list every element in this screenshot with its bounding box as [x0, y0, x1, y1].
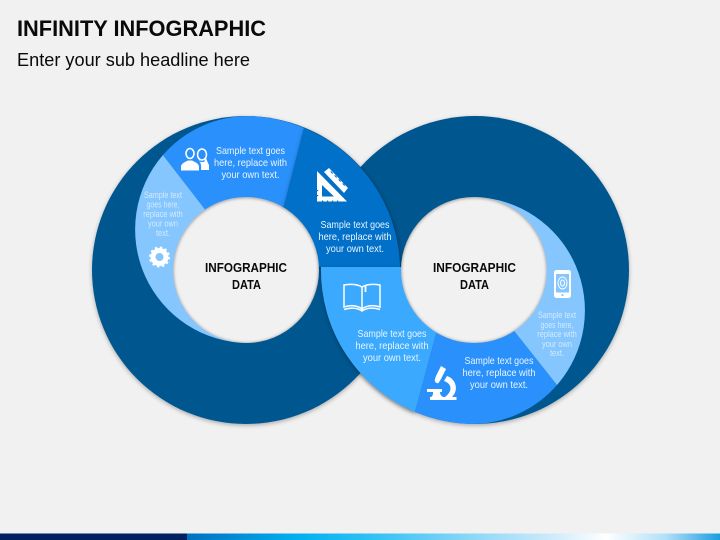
text: left light segment: goes here, [146, 200, 180, 210]
icon: book [344, 284, 380, 311]
infinity diagram [92, 116, 629, 424]
segment: left medium blue [246, 128, 400, 270]
text: left light segment: Sample text [144, 190, 182, 200]
left ring: dark base [92, 116, 400, 424]
text: right light segment: text. [550, 348, 564, 358]
text: left medium segment: your own text. [326, 243, 384, 255]
text: left medium segment: Sample text goes [320, 219, 390, 231]
text: right bright segment: here, replace with [356, 340, 429, 352]
icon: gear [150, 248, 169, 266]
text: right bright segment: your own text. [363, 352, 421, 364]
right ring: dark base [321, 116, 629, 424]
text: right bottom segment: Sample text goes [464, 355, 534, 367]
text: right light segment: goes here, [540, 320, 574, 330]
footer bar: navy section [0, 534, 187, 540]
right center label: DATA [460, 277, 490, 292]
text: left light segment: your own [148, 218, 178, 228]
text: right bright segment [356, 328, 429, 364]
text: right light segment: replace with [537, 329, 577, 339]
segment: left top blue [163, 116, 304, 270]
text: right bottom segment [462, 355, 536, 391]
text: right light segment: your own [542, 339, 572, 349]
text: right light segment: Sample text [538, 310, 576, 320]
text: left top segment [214, 145, 287, 181]
segment: right light blue [474, 197, 585, 385]
footer bar: gradient section [187, 534, 720, 540]
text: right bottom segment: here, replace with [462, 367, 536, 379]
left center circle [172, 196, 320, 344]
segment: right bright blue [321, 267, 474, 412]
left center label: INFOGRAPHIC [205, 260, 288, 275]
text: left top segment: Sample text goes [216, 145, 285, 157]
left center label [205, 260, 288, 292]
text: right light segment [537, 310, 577, 358]
right center circle [400, 196, 548, 344]
text: right bottom segment: your own text. [470, 379, 528, 391]
text: left medium segment: here, replace with [318, 231, 392, 243]
title: INFINITY INFOGRAPHIC [17, 16, 266, 41]
text: left top segment: here, replace with [214, 157, 287, 169]
text: right bright segment: Sample text goes [358, 328, 426, 340]
text: left light segment: text. [156, 228, 170, 238]
icon: smartphone [554, 270, 571, 298]
icon: people [181, 148, 209, 170]
segment: right bottom blue [415, 270, 557, 424]
subtitle: Enter your sub headline here [17, 50, 250, 70]
text: left light segment [143, 190, 183, 238]
right center label: INFOGRAPHIC [433, 260, 517, 275]
text: left medium segment [318, 219, 392, 255]
text: left light segment: replace with [143, 209, 183, 219]
right center label [433, 260, 517, 292]
left center label: DATA [232, 277, 262, 292]
icon: set square and ruler [317, 168, 348, 202]
text: left top segment: your own text. [222, 169, 280, 181]
icon: microscope [427, 366, 456, 400]
segment: left light blue [135, 155, 248, 343]
